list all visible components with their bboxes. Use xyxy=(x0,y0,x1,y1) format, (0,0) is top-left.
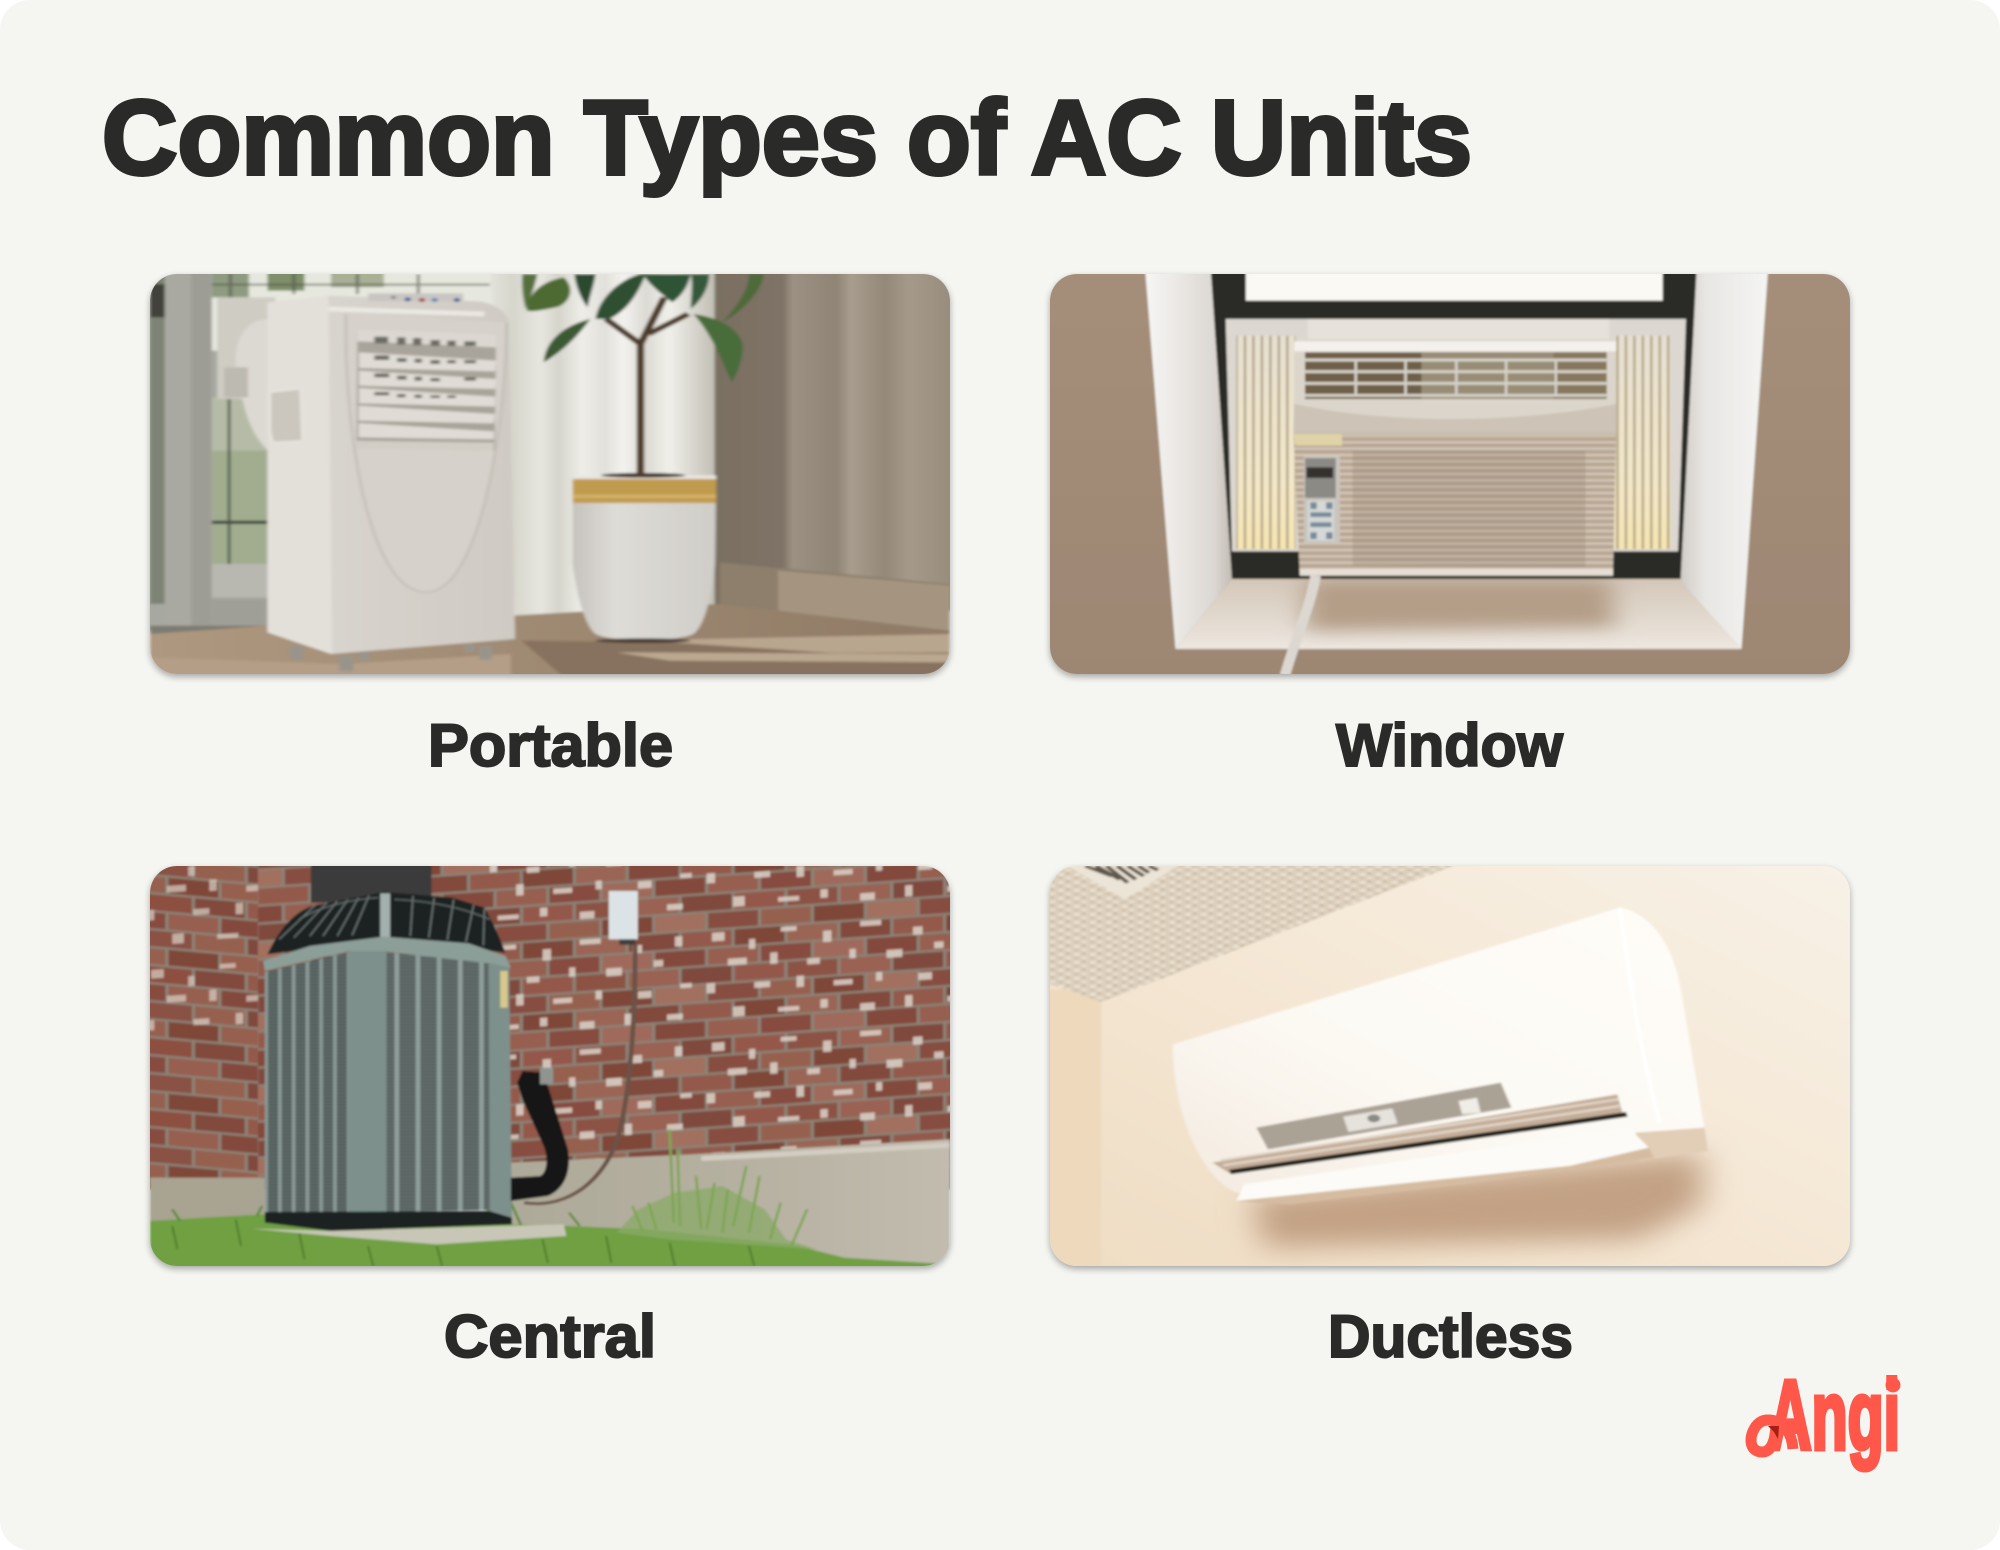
swing flap xyxy=(1236,1128,1649,1201)
white window recess xyxy=(1145,271,1768,649)
accordion side panels xyxy=(1226,319,1686,551)
dark duct behind unit xyxy=(311,863,431,903)
AC side handle xyxy=(270,389,302,442)
AC unit upper section xyxy=(1293,341,1616,432)
panel: portable AC photo xyxy=(150,274,950,674)
photo scene: portable AC in room xyxy=(140,264,987,697)
wood floor xyxy=(150,604,950,677)
AC vent louvers xyxy=(356,329,496,451)
black refrigerant pipe xyxy=(511,1068,569,1201)
photo scene: outdoor condenser by brick wall xyxy=(140,856,1019,1269)
brick wall xyxy=(140,856,1019,1189)
unit body xyxy=(1173,908,1708,1193)
grass xyxy=(150,1129,950,1269)
AC wheels xyxy=(290,644,492,671)
hose vent behind AC xyxy=(217,297,275,452)
title: Common Types of AC Units xyxy=(102,79,1472,197)
grey control strip xyxy=(1256,1083,1511,1149)
window with garden view xyxy=(140,264,492,634)
label: Ductless: Ductless xyxy=(1328,1303,1573,1370)
AC lower front slats xyxy=(1293,432,1616,576)
panel: window AC photo xyxy=(1050,274,1850,674)
photo scene: wall-mounted mini split xyxy=(1040,856,1887,1289)
logo: Angi: Angi xyxy=(1769,1360,1900,1470)
left wall strip xyxy=(1040,989,1101,1289)
wall shadow xyxy=(1252,1153,1702,1248)
photo scene: window AC unit xyxy=(1040,264,1887,697)
wall and baseboard xyxy=(715,271,958,631)
concrete foundation xyxy=(150,1139,950,1269)
planter pot xyxy=(573,473,716,643)
yellow tag xyxy=(1293,434,1342,446)
AC top air grille xyxy=(1305,352,1607,399)
label: Window: Window xyxy=(1336,712,1563,779)
open louver xyxy=(1212,1094,1627,1173)
ceiling vent xyxy=(1062,863,1183,899)
label: Portable: Portable xyxy=(428,712,673,779)
panel: ductless AC photo xyxy=(1050,866,1850,1266)
bright window glass xyxy=(1246,271,1663,301)
plant stem and leaves xyxy=(522,274,764,476)
AC unit body xyxy=(267,293,515,654)
condenser unit xyxy=(263,892,512,1231)
panel: central AC photo xyxy=(150,866,950,1266)
concrete pad xyxy=(252,1224,566,1244)
electrical box and wire xyxy=(524,891,638,1204)
control panel xyxy=(1304,456,1340,544)
textured ceiling xyxy=(1040,863,1461,1002)
power cord xyxy=(1285,576,1316,676)
curtain xyxy=(490,271,720,616)
label: Central: Central xyxy=(444,1303,656,1370)
dark window frame xyxy=(1211,271,1697,579)
